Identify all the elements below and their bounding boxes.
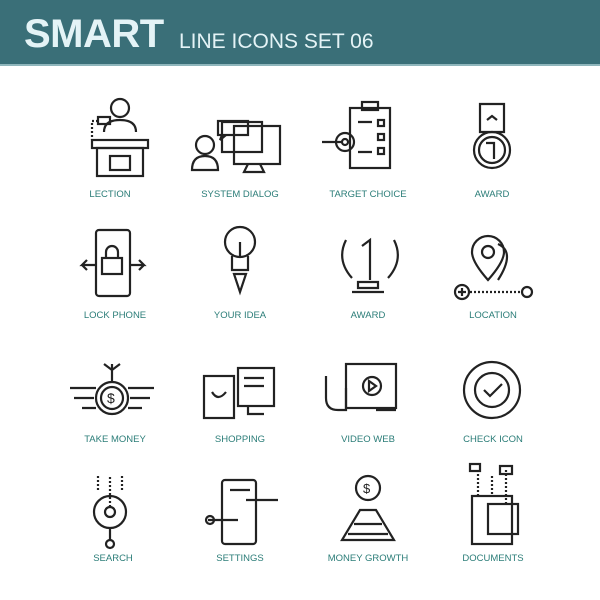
text: DOCUMENTS <box>462 553 524 564</box>
text: LOCK PHONE <box>84 310 146 321</box>
icon: check icon <box>464 362 520 418</box>
text: AWARD <box>351 310 385 321</box>
icon: search <box>94 476 126 548</box>
text: SEARCH <box>93 553 133 564</box>
header: SMART <box>24 12 164 56</box>
icon: money growth <box>342 476 394 540</box>
icon: take money <box>70 364 154 414</box>
icon: shopping <box>204 368 274 418</box>
header <box>0 0 600 66</box>
icon: take money: $ <box>107 390 115 406</box>
icon: your idea <box>225 227 255 292</box>
icon: target choice <box>322 102 390 168</box>
text: SHOPPING <box>215 434 265 445</box>
text: YOUR IDEA <box>214 310 266 321</box>
icon: award trophy <box>342 240 398 292</box>
text: LOCATION <box>469 310 517 321</box>
icon: lection <box>92 99 148 176</box>
text: AWARD <box>475 189 509 200</box>
text: VIDEO WEB <box>341 434 395 445</box>
icon: location <box>455 236 532 299</box>
text: CHECK ICON <box>463 434 523 445</box>
text: TAKE MONEY <box>84 434 146 445</box>
icon: settings <box>206 480 278 544</box>
text: SETTINGS <box>216 553 264 564</box>
text: MONEY GROWTH <box>328 553 408 564</box>
icon: lock phone <box>82 230 144 296</box>
icon: documents <box>470 464 518 544</box>
icon: system dialog <box>192 121 280 172</box>
icon: award medal <box>474 104 510 168</box>
text: TARGET CHOICE <box>329 189 407 200</box>
header: LINE ICONS SET 06 <box>179 30 374 53</box>
text: SYSTEM DIALOG <box>201 189 279 200</box>
icon: video web <box>326 364 396 410</box>
icon: money growth: $ <box>363 481 371 496</box>
labels: LECTION <box>89 189 131 200</box>
